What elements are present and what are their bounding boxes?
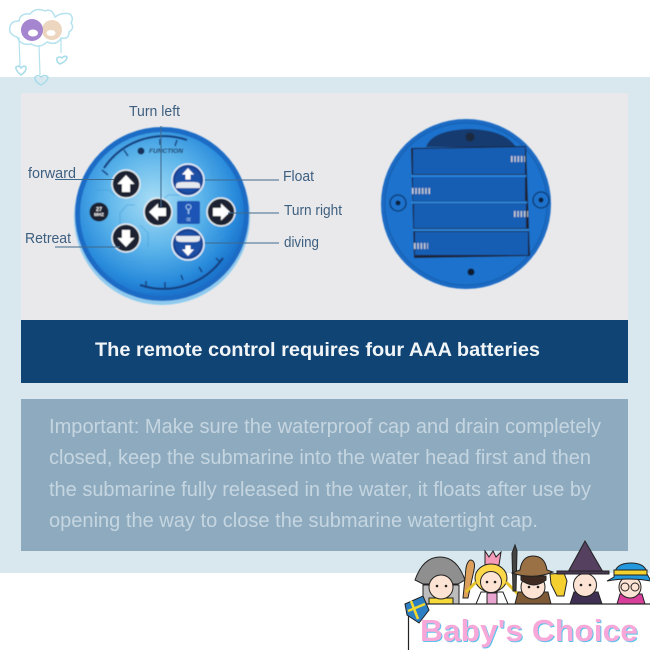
sheep beige	[42, 20, 62, 40]
27 MHz badge: 27	[96, 207, 102, 213]
knight	[415, 557, 474, 605]
panel: important note	[21, 399, 628, 551]
remote control back: battery compartment	[381, 119, 551, 289]
brand name: Baby's Choice	[421, 614, 639, 649]
button: turn right	[207, 198, 235, 226]
princess	[466, 551, 518, 604]
center key: ∝	[185, 214, 192, 224]
label: diving: diving	[284, 234, 319, 251]
center key	[177, 201, 200, 224]
button: turn left	[144, 198, 172, 226]
label: turn left: Turn left	[129, 103, 181, 120]
function label	[138, 148, 184, 155]
button: retreat	[112, 224, 140, 252]
kid with glasses	[607, 563, 650, 604]
logo: cloud with sheep and hearts	[10, 10, 73, 85]
panel: remote control photos	[21, 93, 628, 320]
button: forward	[112, 170, 140, 198]
27 MHz badge: MHZ	[94, 212, 104, 217]
remote control front	[74, 127, 250, 305]
screw posts	[390, 192, 549, 276]
witch	[557, 541, 609, 604]
cowboy	[512, 545, 553, 604]
sign board	[408, 604, 650, 650]
label: forward: forward	[28, 165, 76, 182]
background band	[0, 77, 650, 573]
broom	[550, 573, 567, 596]
banner: battery note: The remote control requires four AAA batteries	[95, 340, 540, 361]
label: turn right: Turn right	[284, 202, 343, 219]
shield	[405, 596, 429, 623]
sheep purple	[21, 19, 43, 41]
function label: FUNCTION	[149, 149, 184, 155]
banner: battery note	[21, 320, 628, 383]
brand name: Baby's Choice	[420, 613, 638, 648]
label: retreat: Retreat	[25, 230, 72, 247]
panel: important note: Important: Make sure the waterproof cap and drain completely	[49, 416, 601, 438]
panel: important note: opening the way to close the submarine watertight cap.	[49, 510, 538, 532]
button: float	[172, 164, 204, 196]
battery bays	[411, 146, 530, 258]
button: diving	[172, 228, 204, 260]
panel: important note: closed, keep the submarine into the water head first and then	[49, 447, 591, 469]
mascot kids with sign	[405, 541, 650, 650]
label: float: Float	[283, 168, 315, 185]
leader lines	[55, 126, 279, 247]
panel: important note: the submarine fully released in the water, it floats after use by	[49, 479, 591, 501]
27 MHz badge	[90, 202, 108, 222]
